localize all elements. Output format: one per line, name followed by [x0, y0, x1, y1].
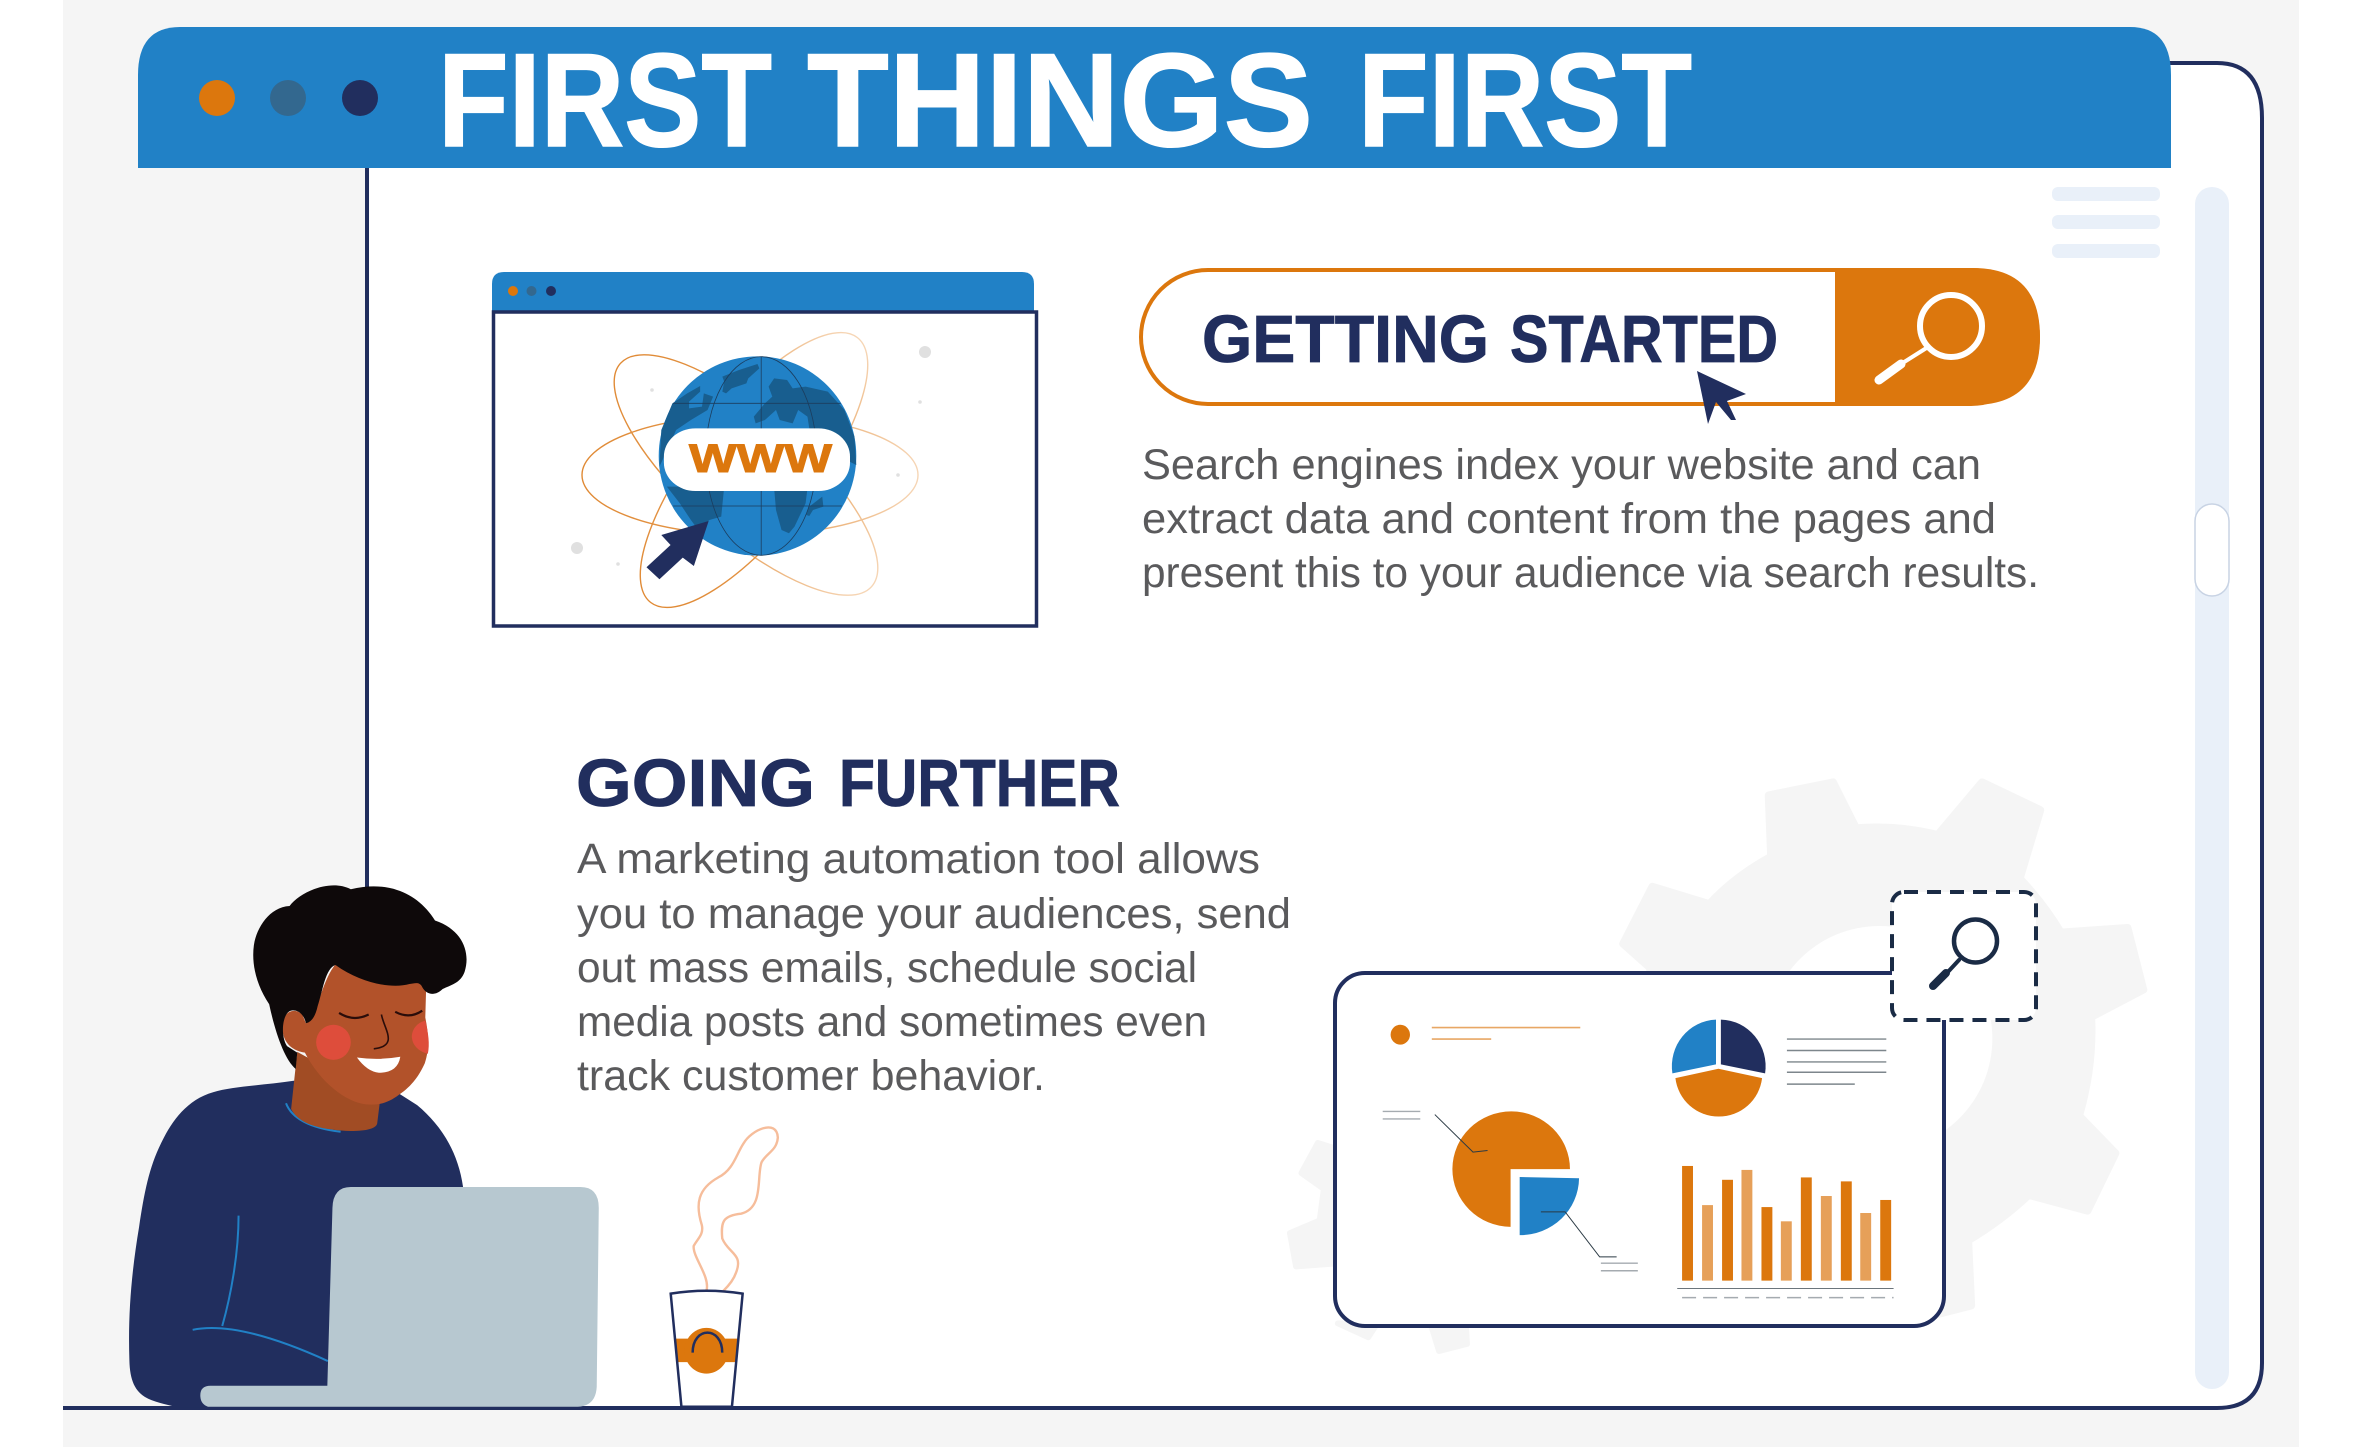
- window dots: [199, 80, 378, 116]
- character: person at laptop: [129, 885, 599, 1408]
- browser box: [494, 312, 1036, 626]
- magnifier box: [1892, 892, 2036, 1020]
- heading: going further: GOING: [576, 746, 815, 821]
- orbits: [581, 301, 918, 639]
- bar chart: [1677, 1166, 1894, 1298]
- heading: getting started: STARTED: [1510, 302, 1778, 377]
- icon: magnifying glass: [1879, 295, 1982, 380]
- large gear: [1623, 782, 2143, 1319]
- coffee cup: [671, 1127, 778, 1407]
- browser bar: [492, 272, 1034, 311]
- text: getting started: [1142, 441, 2039, 597]
- steam: [694, 1127, 778, 1291]
- text: going further: you to manage your audiences, send: [577, 890, 1291, 938]
- www pill: [664, 428, 850, 491]
- text: getting started: present this to your audience via search results.: [1142, 549, 2039, 597]
- status dot and lines: [1391, 1025, 1580, 1045]
- pie chart: large with exploded slice: [1383, 1111, 1638, 1271]
- heading: getting started: GETTING: [1202, 302, 1489, 377]
- panel: analytics dashboard: [1335, 892, 2036, 1326]
- title: [438, 27, 1692, 175]
- specks: [571, 346, 931, 566]
- text: going further: media posts and sometimes even: [577, 998, 1207, 1046]
- icon: cursor: [1697, 371, 1746, 424]
- title bar: [138, 27, 2171, 175]
- face: [282, 964, 428, 1105]
- cup body: [671, 1291, 743, 1407]
- title: FIRST: [1358, 27, 1692, 175]
- smile: [357, 1057, 400, 1073]
- text: going further: out mass emails, schedule social: [577, 944, 1197, 992]
- background gears: [1290, 782, 2143, 1351]
- eyes and nose: [339, 1011, 422, 1049]
- search bar: [1141, 268, 2040, 424]
- neck: [291, 1052, 380, 1131]
- title: FIRST: [438, 27, 772, 175]
- menu icon: [2052, 187, 2160, 258]
- globe: [646, 356, 856, 579]
- panel: globe browser illustration: [492, 272, 1036, 639]
- cup band: [675, 1339, 739, 1362]
- sweater: [129, 1081, 468, 1408]
- laptop: [200, 1187, 599, 1407]
- small gear: [1290, 1143, 1467, 1351]
- sweater lines: [193, 1103, 341, 1361]
- browser window frame: [367, 63, 2262, 1408]
- title: THINGS: [807, 27, 1313, 175]
- cursor arrow: [646, 521, 709, 579]
- heading: going further: [576, 746, 1120, 821]
- text: going further: [577, 835, 1291, 1100]
- text: going further: track customer behavior.: [577, 1052, 1045, 1100]
- hair: [253, 885, 467, 1069]
- scrollbar: [2195, 187, 2229, 1389]
- www label: WWW: [689, 437, 832, 481]
- heading: going further: FURTHER: [839, 746, 1120, 821]
- text: going further: A marketing automation tool allows: [577, 835, 1260, 883]
- heading: getting started: [1202, 302, 1778, 377]
- text: getting started: extract data and content from the pages and: [1142, 495, 1996, 543]
- pie chart: three slices: [1672, 1020, 1886, 1117]
- cheeks: [316, 1025, 351, 1060]
- text: getting started: Search engines index your website and can: [1142, 441, 1981, 489]
